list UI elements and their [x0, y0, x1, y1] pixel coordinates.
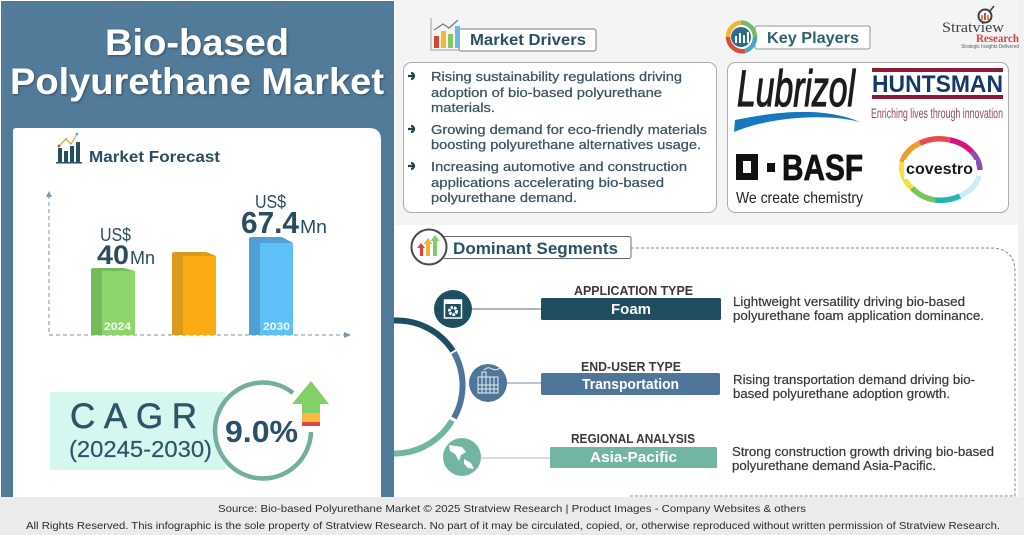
panel: key players logos	[728, 60, 1008, 212]
bar chart	[46, 191, 351, 338]
value label: 2030	[241, 192, 327, 240]
logo: BASF: BASF	[782, 147, 863, 188]
icon: asia-pacific map	[443, 438, 481, 476]
segment: regional analysis: polyurethane demand Asia-Pacific.	[732, 459, 936, 473]
value label: 2024	[97, 225, 155, 270]
icons: bullets	[408, 73, 414, 169]
segment: application type: Foam	[611, 302, 651, 318]
callout: CAGR: 9.0%	[225, 414, 298, 449]
heading: dominant segments: Dominant Segments	[453, 239, 618, 258]
segment: regional analysis: Asia-Pacific	[590, 450, 677, 466]
icon: market forecast chart	[56, 133, 82, 164]
panel: key players heading: Key Players	[767, 30, 859, 47]
value label: 2030: US$	[255, 192, 286, 212]
icon: application window	[434, 290, 472, 328]
logo: Lubrizol	[734, 60, 860, 132]
callout: CAGR	[50, 381, 329, 481]
panel: market drivers heading: Market Drivers	[470, 32, 586, 49]
logo: Stratview Research: Stratview	[942, 20, 1004, 36]
text: drivers: polyurethane demand.	[431, 190, 577, 205]
segment: application type: Lightweight versatility driving bio-based	[733, 295, 965, 309]
panel: dominant segments outline	[630, 248, 1015, 496]
segment: regional analysis	[443, 431, 994, 476]
icon: market drivers chart	[434, 20, 460, 48]
segment: end-user type: based polyurethane adoption growth.	[733, 387, 950, 401]
value label: 2024: 40	[97, 240, 129, 270]
value label: 2024: Mn	[130, 248, 155, 268]
text: drivers	[431, 69, 708, 205]
footer	[0, 497, 1024, 535]
segment: application type: APPLICATION TYPE	[574, 283, 693, 298]
logo: BASF: We create chemistry	[736, 190, 863, 207]
title	[10, 22, 384, 102]
bar: middle year	[172, 252, 216, 335]
logo: Lubrizol: Lubrizol	[737, 60, 856, 117]
segment: end-user type: Rising transportation demand driving bio-	[733, 373, 975, 387]
logo: Huntsman	[871, 68, 1003, 121]
segment: regional analysis: Strong construction growth driving bio-based	[732, 445, 994, 459]
logo: Covestro	[902, 139, 980, 200]
icon: up arrow	[292, 381, 329, 426]
panel: forecast card	[13, 128, 381, 497]
segment: regional analysis: REGIONAL ANALYSIS	[571, 431, 695, 446]
heading: dominant segments	[412, 230, 631, 264]
heading: market forecast: Market Forecast	[89, 149, 221, 166]
logo: BASF	[736, 147, 863, 207]
footer: All Rights Reserved. This infographic is the sole property of Stratview Research. No part of it may be circulated, copied, or, otherwise reproduced without written permission of Stratview Research.	[26, 520, 1000, 532]
text: drivers: boosting polyurethane alternatives usage.	[431, 137, 701, 152]
logo: Stratview Research	[942, 6, 1019, 50]
value label: 2030: Mn	[300, 217, 327, 237]
logo: Covestro: covestro	[906, 161, 973, 178]
segment: end-user type: END-USER TYPE	[581, 359, 681, 374]
text: drivers: Rising sustainability regulations driving	[431, 69, 682, 84]
text: drivers: materials.	[431, 100, 495, 115]
panel: market drivers list	[404, 62, 716, 212]
callout: CAGR: CAGR	[70, 397, 197, 436]
title: Polyurethane Market	[10, 61, 384, 102]
panel: key players heading	[726, 22, 870, 52]
title: Bio-based	[105, 22, 289, 63]
panel: market drivers heading	[431, 18, 596, 51]
chart axes	[49, 195, 346, 335]
value label: 2030: 67.4	[241, 205, 300, 240]
bar: 2030	[249, 237, 293, 335]
callout: CAGR: (20245-2030)	[69, 436, 212, 462]
text: drivers: Growing demand for eco-friendly materials	[431, 122, 708, 137]
icon: factory	[469, 364, 507, 402]
value label: 2024: US$	[100, 225, 131, 245]
text: drivers: adoption of bio-based polyurethane	[431, 85, 662, 100]
footer: Source: Bio-based Polyurethane Market © 2025 Stratview Research | Product Images - Company Websites & others	[218, 503, 806, 515]
panel: left title and forecast	[1, 1, 394, 497]
segment: end-user type: Transportation	[582, 377, 679, 393]
logo: Stratview Research: Research	[976, 31, 1019, 45]
text: drivers: applications accelerating bio-based	[431, 175, 664, 190]
logo: Stratview Research: Strategic Insights Delivered	[961, 44, 1019, 50]
bar: 2024: 2024	[104, 321, 132, 333]
ring: segments arc	[394, 320, 463, 454]
segment: end-user type	[469, 359, 975, 402]
text: drivers: Increasing automotive and construction	[431, 159, 687, 174]
bar: 2030: 2030	[263, 321, 290, 333]
icon: key players ring	[726, 22, 756, 52]
segment: application type: polyurethane foam application dominance.	[733, 309, 984, 323]
logo: Huntsman: HUNTSMAN	[872, 71, 1003, 98]
bar: 2024	[91, 268, 135, 335]
icon: segments arrows	[412, 230, 446, 264]
segment: application type	[434, 283, 984, 328]
